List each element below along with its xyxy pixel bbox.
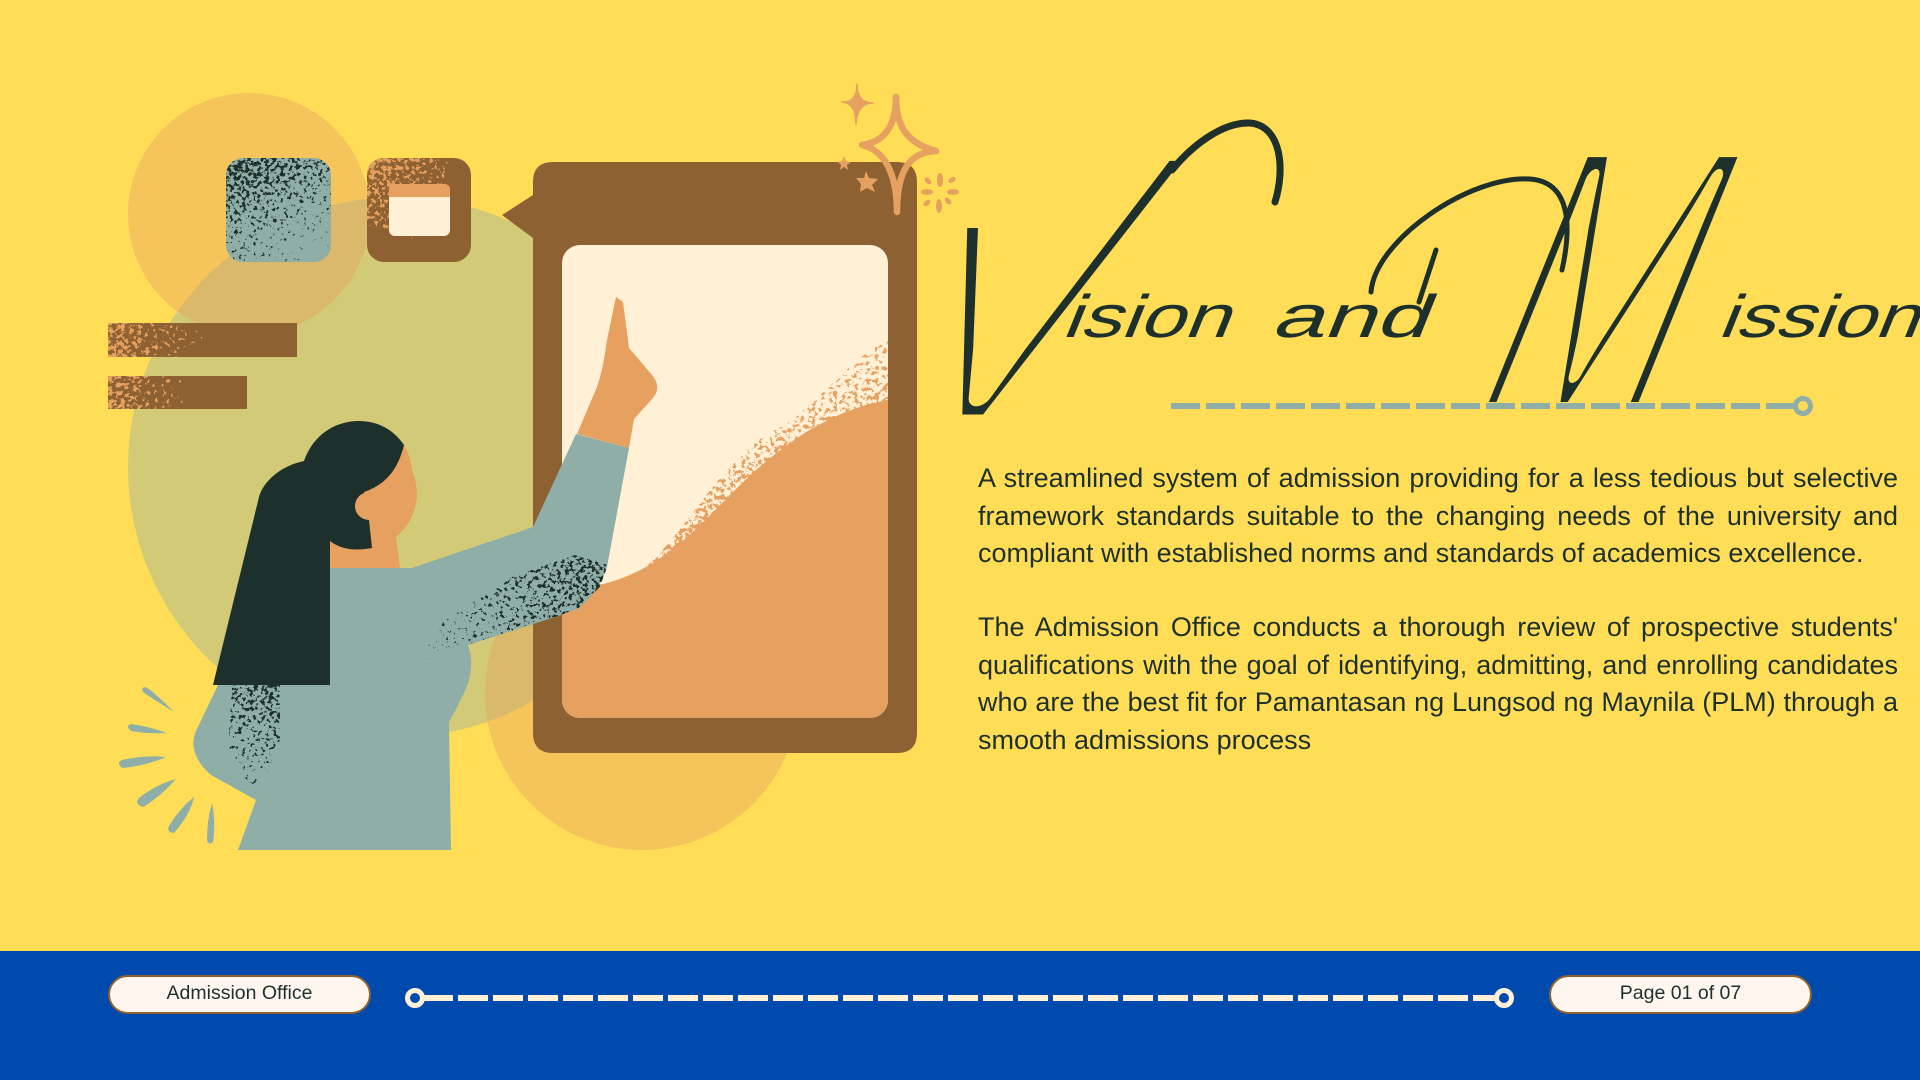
paragraph: vision: framework standards suitable to the changing needs of the university and [978,500,1898,530]
footer pill: page number: Page 01 of 07 [1620,982,1741,1004]
paragraph: vision: A streamlined system of admission providing for a less tedious but selective [978,463,1898,493]
bar: short [108,376,247,409]
sleeve speckle [416,555,608,662]
head and neck [330,440,417,568]
small solid sparkle [842,84,873,124]
side speckle [228,685,280,785]
background circle: lower orange [485,536,799,850]
emphasis rays [119,687,214,844]
title: and [1265,284,1447,350]
large outlined sparkle [862,97,936,212]
icon: speckled teal tile [226,158,331,262]
burst [921,173,959,213]
paragraph: mission: The Admission Office conducts a thorough review of prospective students' [978,612,1898,642]
hill [540,400,888,730]
device screen [540,245,888,730]
ear [355,492,383,520]
device frame [502,162,917,753]
bar: long [108,323,297,357]
title: ision [1056,284,1249,350]
hair [213,421,404,685]
paragraph: mission: smooth admissions process [978,724,1311,754]
footer pill: office: Admission Office [167,982,312,1004]
paragraph: mission [978,612,1898,754]
title: V [808,62,1242,514]
title: M [1426,64,1801,494]
paragraph: vision: compliant with established norms and standards of academics excellence. [978,538,1863,568]
title divider [1171,398,1810,414]
footer pill: office [108,975,371,1014]
footer band [0,951,1920,1080]
footer pill: page number [1549,975,1812,1014]
paragraph: mission: who are the best fit for Pamantasan ng Lungsod ng Maynila (PLM) through a [978,687,1898,717]
hand [577,297,657,448]
paragraph: mission: qualifications with the goal of identifying, admitting, and enrolling candidates [978,650,1898,680]
sparkles [838,84,959,213]
background circle: upper orange [128,93,370,335]
speckled hill edge [640,340,888,580]
footer dashed line [408,990,1512,1006]
person [193,297,657,850]
background circle: sage [128,197,668,737]
paragraph: vision [978,463,1898,568]
title: ission [1712,284,1920,350]
star large [856,171,878,192]
title flourishes [1172,123,1567,302]
torso and sleeve [193,434,629,850]
icon: brown window tile [367,158,471,262]
star small [838,156,851,170]
title [962,120,1920,414]
